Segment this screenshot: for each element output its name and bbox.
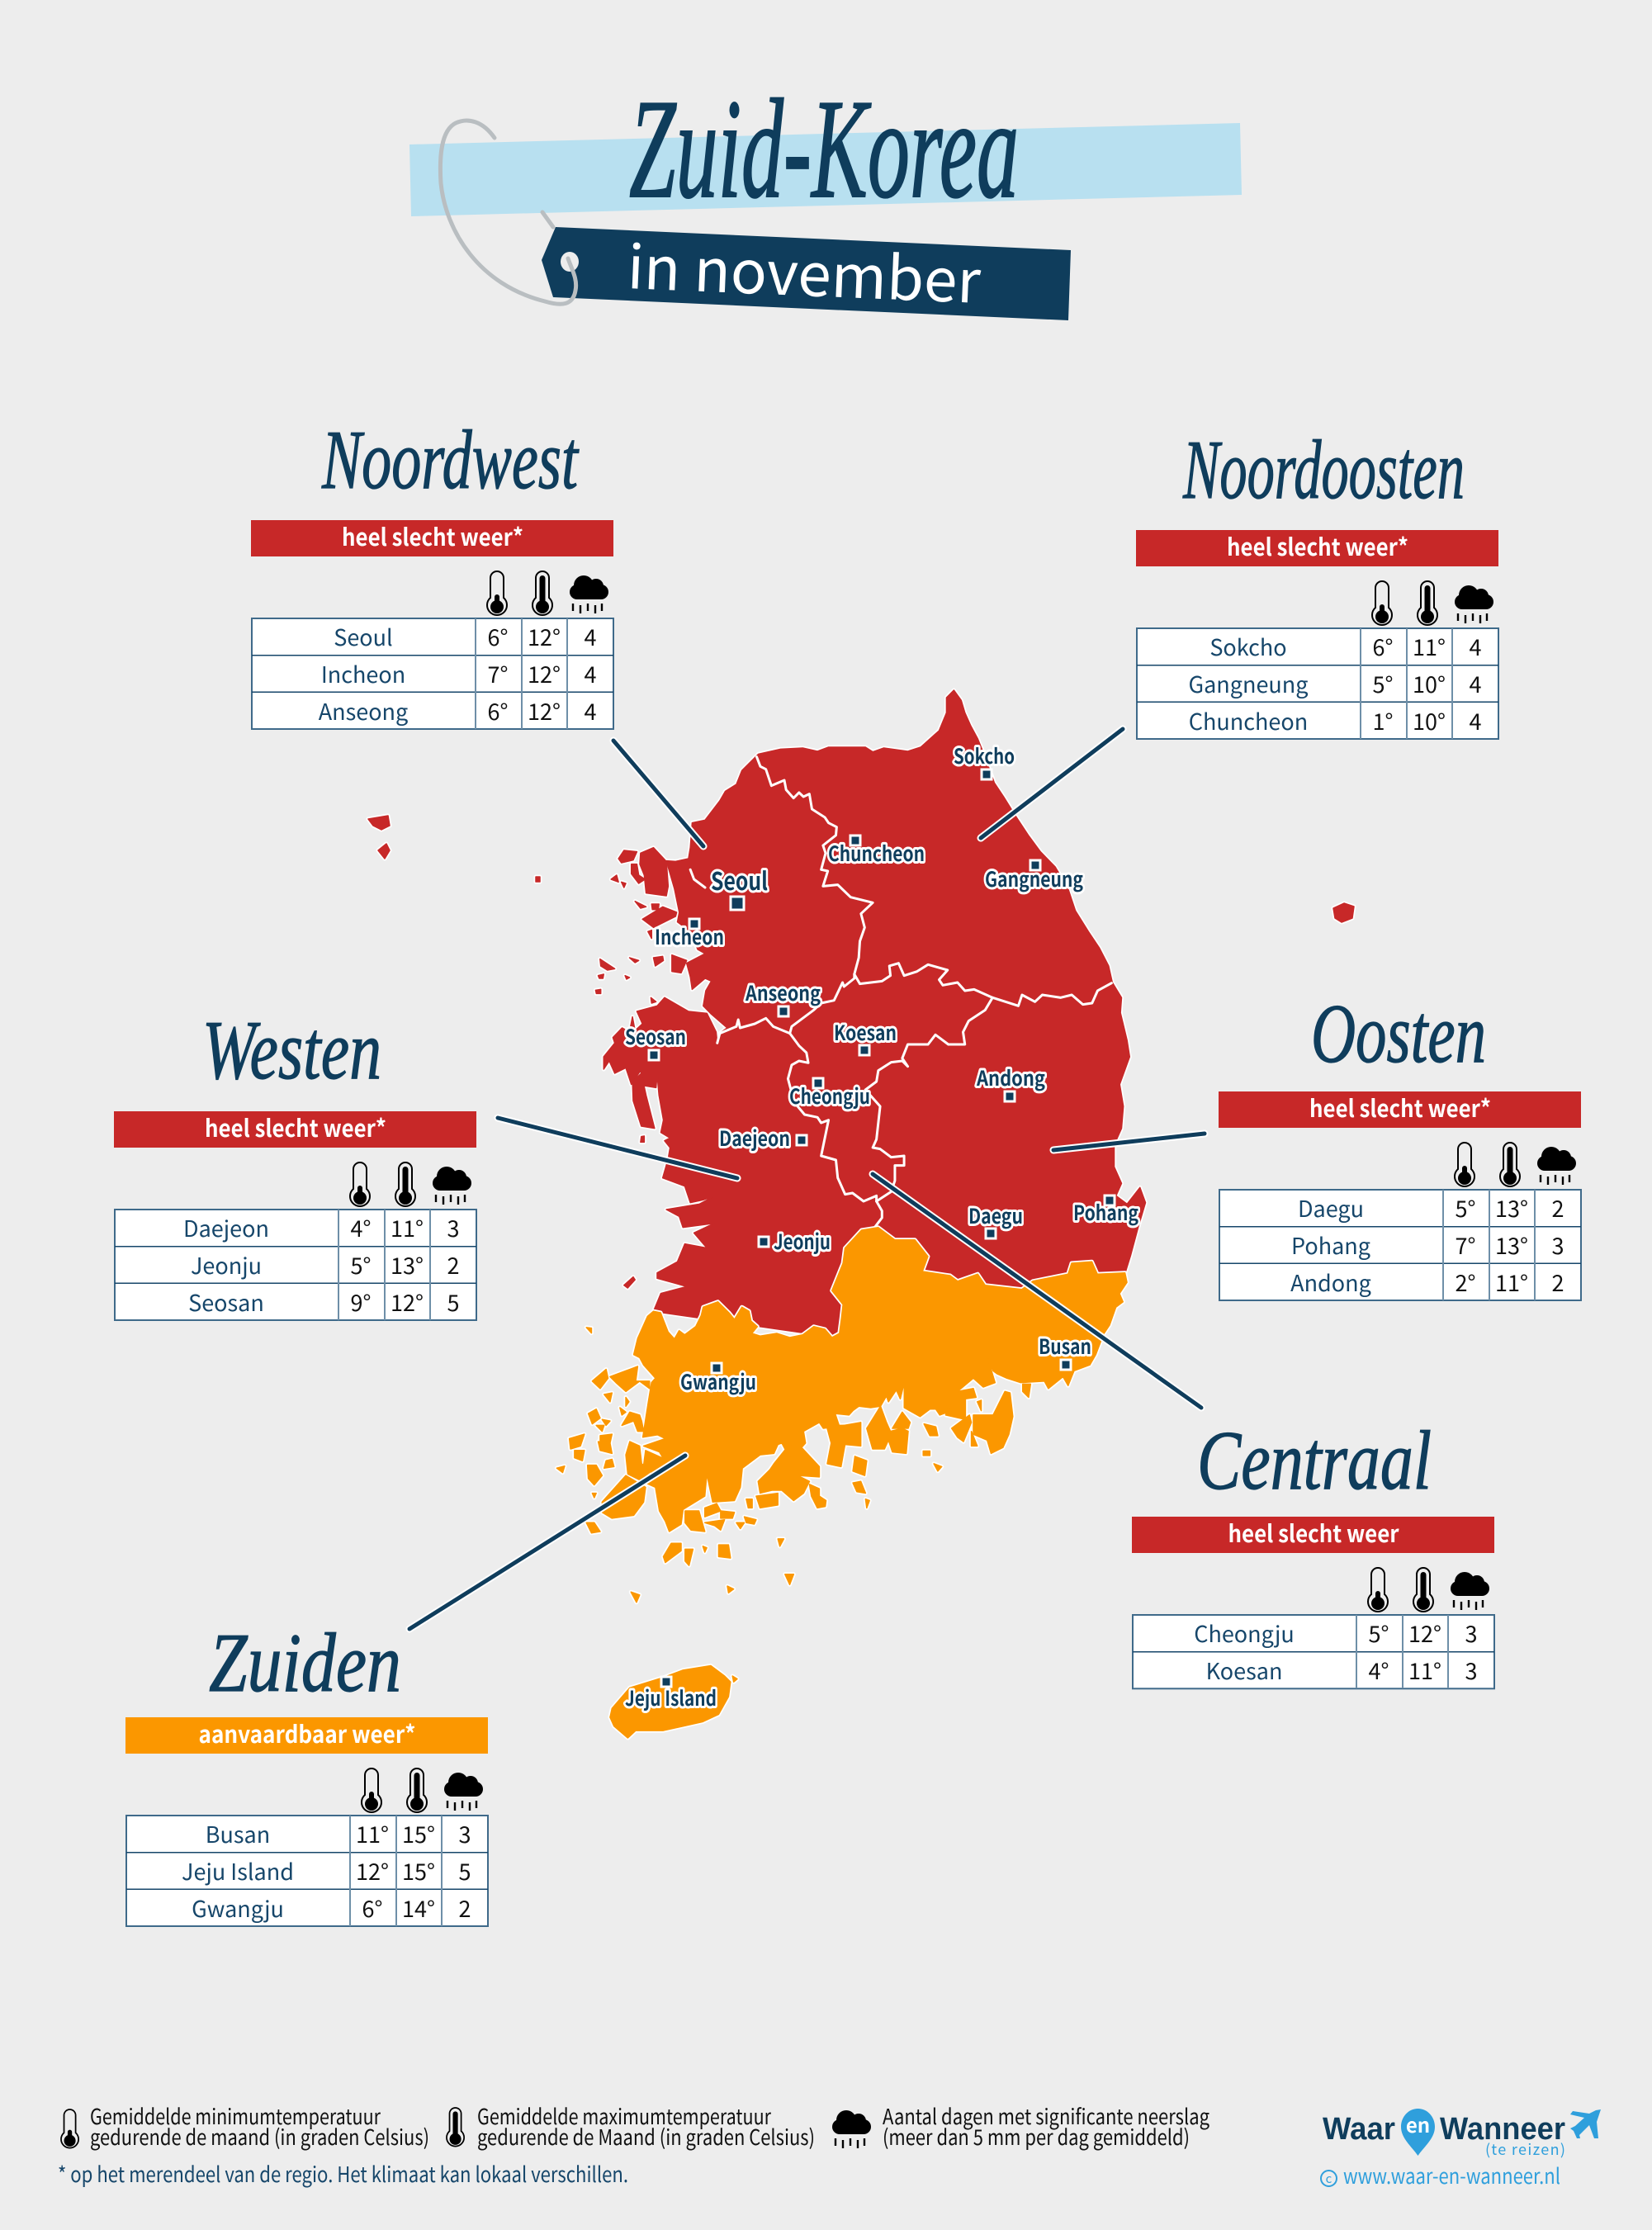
table block: Noordwest: Seoul (334, 620, 393, 652)
icon: map pin with en (1401, 2109, 1435, 2156)
table block: Noordoosten: heel slecht weer* (1227, 528, 1408, 563)
table block: Noordoosten: 10° (1413, 704, 1446, 736)
table block: Zuiden: Busan (206, 1817, 270, 1849)
table block: Westen: 9° (351, 1285, 371, 1318)
legend: maximum temperature: gedurende de Maand (in graden Celsius) (477, 2121, 815, 2152)
icon: copyright: c (1326, 2170, 1332, 2187)
table block: Noordoosten: 11° (1413, 630, 1446, 662)
table block: Noordwest: 12° (528, 694, 561, 727)
table block: Noordoosten: 4 (1470, 630, 1481, 662)
table block: Westen: 4° (351, 1211, 371, 1243)
tag hole (561, 252, 579, 272)
table block: Westen: 12° (391, 1285, 424, 1318)
table block: Centraal: 11° (1408, 1654, 1441, 1686)
heading: Centraal: Centraal (1197, 1414, 1432, 1508)
table block: Noordoosten: 4 (1470, 704, 1481, 736)
heading: Noordwest: Noordwest (321, 414, 580, 507)
logo tagline: (te reizen) (1485, 2138, 1565, 2160)
subtitle: in november: in november (626, 219, 983, 320)
table block: Westen: 2 (447, 1248, 459, 1281)
table block: Noordwest: 4 (585, 694, 596, 727)
table block: Zuiden: 12° (356, 1854, 389, 1887)
map of South Korea (368, 690, 1354, 1738)
table block: Zuiden: 11° (356, 1817, 389, 1849)
table block: Zuiden: Gwangju (192, 1891, 284, 1924)
city: Cheongju: Cheongju (789, 1081, 870, 1110)
table block: Oosten: 2 (1552, 1266, 1564, 1298)
city: Sokcho: Sokcho (954, 741, 1015, 770)
legend: maximum temperature (447, 2100, 815, 2152)
title: Zuid-Korea: Zuid-Korea (629, 71, 1019, 228)
city: Seosan: Seosan (625, 1021, 686, 1051)
table block: Oosten: 13° (1495, 1191, 1528, 1224)
icon: map pin with en: en (1406, 2109, 1430, 2138)
table block: Noordwest: 6° (488, 620, 508, 652)
tag string curve (440, 121, 576, 304)
table block: Noordoosten: 5° (1373, 667, 1393, 699)
city: Daegu: Daegu (968, 1200, 1023, 1230)
table block: Noordwest: heel slecht weer* (342, 518, 523, 553)
city: Anseong (745, 978, 821, 1016)
title band (409, 123, 1242, 216)
table block: Westen: 5° (351, 1248, 371, 1281)
table block: Noordwest (251, 518, 613, 729)
city: Jeju Island: Jeju Island (625, 1683, 717, 1712)
table block: Westen (114, 1110, 476, 1320)
table block: Centraal: Koesan (1206, 1654, 1282, 1686)
panel: Zuiden (125, 1617, 488, 1926)
table block: Westen: Daejeon (183, 1211, 269, 1243)
table block: Oosten: 2° (1456, 1266, 1475, 1298)
table block: Noordoosten: Gangneung (1188, 667, 1309, 699)
city: Busan: Busan (1039, 1331, 1091, 1361)
region: orange south (556, 1228, 1127, 1738)
legend: maximum temperature: Gemiddelde maximumtemperatuur (477, 2100, 772, 2131)
table block: Centraal: Cheongju (1194, 1617, 1295, 1649)
logo word: Wanneer: Wanneer (1440, 2112, 1565, 2147)
icon: copyright (1321, 2170, 1337, 2187)
city: Jeonju (759, 1226, 831, 1256)
table block: Noordoosten (1136, 528, 1498, 739)
legend: minimum temperature: Gemiddelde minimumtemperatuur (90, 2100, 381, 2131)
table block: Zuiden: Jeju Island (182, 1854, 294, 1887)
table block: Noordoosten: 6° (1373, 630, 1393, 662)
panel: Noordoosten (1136, 424, 1498, 739)
table block: Oosten: 7° (1456, 1229, 1475, 1261)
leader line: Oosten (1053, 1134, 1205, 1150)
panel: Westen (114, 1004, 476, 1320)
table block: Zuiden: 14° (402, 1891, 435, 1924)
city: Seosan (625, 1021, 686, 1060)
table block: Noordoosten: Chuncheon (1189, 704, 1308, 736)
table block: Westen: Seosan (188, 1285, 264, 1318)
table block: Oosten (1219, 1090, 1581, 1300)
region: red north and centre silhouette (368, 690, 1354, 1338)
legend: minimum temperature (61, 2100, 429, 2152)
panel: Centraal (1132, 1414, 1494, 1688)
table block: Zuiden: 2 (459, 1891, 471, 1924)
table block: Oosten: 5° (1456, 1191, 1475, 1224)
leader line: Zuiden (409, 1456, 685, 1629)
city: Incheon: Incheon (655, 921, 724, 951)
icon: airplane (1570, 2109, 1601, 2138)
city: Sokcho (954, 741, 1015, 779)
table block: Centraal: 3 (1465, 1654, 1478, 1686)
table block: Zuiden: 15° (402, 1817, 435, 1849)
city: Jeonju: Jeonju (774, 1226, 831, 1256)
table block: Zuiden: 15° (402, 1854, 435, 1887)
city: Busan (1039, 1331, 1091, 1370)
city: Koesan: Koesan (834, 1017, 897, 1047)
heading: Oosten: Oosten (1311, 987, 1486, 1081)
legend (58, 2100, 1209, 2189)
table block: Centraal: 12° (1408, 1617, 1441, 1649)
table block: Westen: 13° (391, 1248, 424, 1281)
footnote: * op het merendeel van de regio. Het klimaat kan lokaal verschillen. (58, 2158, 628, 2189)
city: Anseong: Anseong (745, 978, 821, 1007)
city: Daejeon: Daejeon (719, 1123, 790, 1153)
table block: Zuiden: 3 (459, 1817, 471, 1849)
city: Koesan (834, 1017, 897, 1055)
table block: Noordwest: 12° (528, 657, 561, 689)
table block: Zuiden: 5 (459, 1854, 471, 1887)
table block: Noordoosten: Sokcho (1209, 630, 1287, 662)
city markers and labels (625, 741, 1138, 1712)
table block: Westen: 11° (391, 1211, 424, 1243)
city: Seoul: Seoul (711, 861, 768, 897)
table block: Centraal (1132, 1515, 1494, 1688)
city: Chuncheon: Chuncheon (828, 838, 925, 868)
heading: Westen: Westen (202, 1004, 381, 1097)
city: Pohang: Pohang (1073, 1197, 1138, 1227)
table block: Centraal: 3 (1465, 1617, 1478, 1649)
luggage tag (542, 227, 1071, 320)
table block: Noordoosten: 4 (1470, 667, 1481, 699)
table block: Noordwest: Incheon (321, 657, 405, 689)
region boundaries (690, 757, 1111, 1228)
table block: Oosten: 11° (1495, 1266, 1528, 1298)
leader line: Noordoosten (981, 729, 1123, 838)
table block: Oosten: Pohang (1291, 1229, 1370, 1261)
table block: Zuiden: aanvaardbaar weer* (198, 1716, 416, 1750)
table block: Centraal: 5° (1369, 1617, 1389, 1649)
leader line: Westen (498, 1118, 737, 1178)
title banner (409, 71, 1242, 320)
legend: minimum temperature: gedurende de maand (in graden Celsius) (90, 2121, 429, 2152)
website: www.waar-en-wanneer.nl (1343, 2160, 1560, 2190)
table block: Zuiden: 6° (362, 1891, 382, 1924)
table block: Westen: 3 (447, 1211, 459, 1243)
table block: Noordoosten: 10° (1413, 667, 1446, 699)
logo word: Waar: Waar (1323, 2112, 1395, 2147)
table block: Oosten: Daegu (1298, 1191, 1364, 1224)
legend: precipitation (832, 2100, 1209, 2152)
logo: Waar en Wanneer (1321, 2109, 1601, 2190)
table block: Noordwest: 6° (488, 694, 508, 727)
panel: Noordwest (251, 414, 613, 729)
table block: Oosten: 13° (1495, 1229, 1528, 1261)
city: Andong: Andong (976, 1063, 1045, 1092)
table block: Westen: 5 (447, 1285, 459, 1318)
table block: Westen: Jeonju (191, 1248, 262, 1281)
heading: Zuiden: Zuiden (209, 1617, 401, 1710)
heading: Noordoosten: Noordoosten (1182, 424, 1465, 517)
table block: Centraal: heel slecht weer (1228, 1515, 1399, 1550)
table block: Oosten: Andong (1290, 1266, 1371, 1298)
panel: Oosten (1219, 987, 1581, 1300)
legend: precipitation: Aantal dagen met significante neerslag (883, 2100, 1209, 2131)
table block: Noordoosten: 1° (1373, 704, 1393, 736)
table block: Noordwest: 4 (585, 657, 596, 689)
city: Gwangju: Gwangju (680, 1366, 756, 1396)
table block: Noordwest: Anseong (319, 694, 408, 727)
table block: Oosten: heel slecht weer* (1309, 1090, 1491, 1124)
table block: Centraal: 4° (1369, 1654, 1389, 1686)
table block: Noordwest: 4 (585, 620, 596, 652)
table block: Westen: heel slecht weer* (205, 1110, 386, 1144)
table block: Oosten: 3 (1552, 1229, 1564, 1261)
table block: Noordwest: 12° (528, 620, 561, 652)
legend: precipitation: (meer dan 5 mm per dag gemiddeld) (883, 2121, 1190, 2152)
table block: Oosten: 2 (1552, 1191, 1564, 1224)
city: Gangneung: Gangneung (985, 864, 1083, 893)
city: Seoul (711, 861, 768, 910)
city: Daegu (968, 1200, 1023, 1238)
table block: Zuiden (125, 1716, 488, 1926)
city: Andong (976, 1063, 1045, 1101)
leader line: Noordwest (613, 741, 703, 846)
leader line: Centraal (873, 1174, 1201, 1408)
table block: Noordwest: 7° (488, 657, 508, 689)
